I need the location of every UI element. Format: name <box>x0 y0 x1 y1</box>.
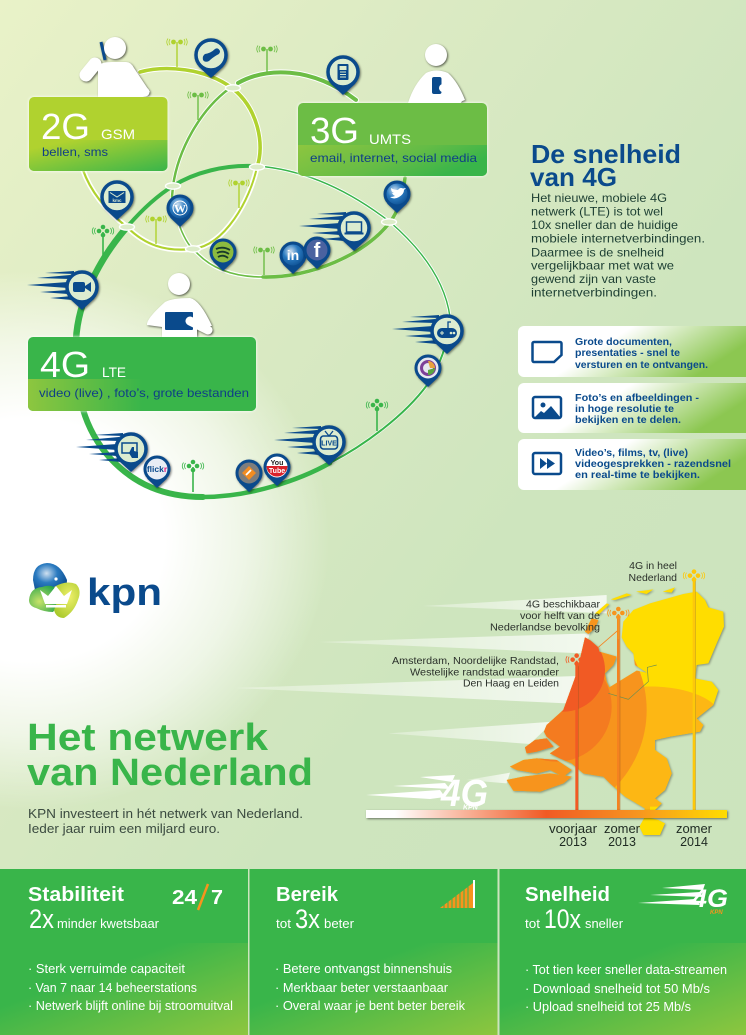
panel: documenten <box>518 326 746 377</box>
icon: mail pin <box>102 182 132 220</box>
metric: 3x <box>276 904 355 934</box>
icon: youtube pin <box>265 455 289 486</box>
timeline labels: 2013 <box>608 835 636 849</box>
mast: zomer 2013 <box>608 607 629 810</box>
text: foto's <box>575 392 700 426</box>
heading: De snelheid van 4G: De snelheid <box>531 139 681 169</box>
timeline labels: zomer <box>676 822 712 836</box>
bullets: · Netwerk blijft online bij stroomuitval <box>28 999 233 1013</box>
text: documenten <box>575 336 708 371</box>
icon: 24/7: 24 <box>172 887 198 909</box>
icon: twitter pin <box>385 182 409 213</box>
text: subtitle <box>28 806 303 836</box>
map labels: 4G beschikbaar <box>526 598 601 610</box>
bullets <box>28 962 233 1013</box>
bullets: · Download snelheid tot 50 Mb/s <box>525 982 710 996</box>
icon: fast forward <box>533 453 561 474</box>
map labels: Westelijke randstad waaronder <box>410 666 560 678</box>
timeline labels: voorjaar <box>549 822 597 836</box>
text: documenten: Grote documenten, <box>575 336 672 348</box>
metric: 2x: 2x <box>29 904 54 934</box>
metric: 10x: 10x <box>544 904 581 934</box>
2G loop <box>83 69 260 250</box>
icon: mail pin: kmc <box>112 198 122 203</box>
icon: 4G KPN: 4G <box>691 885 728 913</box>
icon: live tv pin with speed lines: LIVE <box>321 440 337 448</box>
panel: bereik <box>250 869 498 1035</box>
bullets: · Betere ontvangst binnenshuis <box>275 962 452 976</box>
title: van Nederland <box>27 752 313 794</box>
text: subtitle: KPN investeert in hét netwerk van Nederland. <box>28 806 303 821</box>
icon: touch screen pin with speed lines <box>76 433 146 472</box>
logo: 4G speed: 4G <box>440 773 488 815</box>
panel: 3G UMTS <box>298 103 487 176</box>
text: kpn wordmark: kpn <box>87 572 162 614</box>
text: 4G intro: internetverbindingen. <box>531 286 657 300</box>
text: foto's: Foto’s en afbeeldingen - <box>575 392 700 404</box>
text: 4G intro: 10x sneller dan de huidige <box>531 218 678 232</box>
title <box>27 717 313 794</box>
text: 4G intro: mobiele internetverbindingen. <box>531 232 705 246</box>
metric: 10x: sneller <box>585 916 624 931</box>
map: Nederland coverage <box>506 588 726 838</box>
icon: share pin <box>237 461 261 492</box>
panel: 2G GSM <box>29 97 168 171</box>
bullets: · Van 7 naar 14 beheerstations <box>28 981 197 995</box>
icon: flickr pin: flickr <box>147 464 168 474</box>
icon: 4G KPN: KPN <box>710 910 723 916</box>
icon: image <box>533 397 561 418</box>
timeline labels: 2013 <box>559 835 587 849</box>
icon: youtube pin: You <box>271 460 283 467</box>
heading: stabiliteit: Stabiliteit <box>28 884 124 906</box>
panel: snelheid <box>500 869 746 1035</box>
text: 4G intro <box>531 191 705 300</box>
text: email, internet, social media: email, internet, social media <box>310 151 477 165</box>
network nodes <box>120 85 396 252</box>
heading: 3G: 3G <box>310 110 359 151</box>
label: GSM: GSM <box>101 126 135 142</box>
bullets <box>525 963 727 1014</box>
bullets: · Merkbaar beter verstaanbaar <box>275 981 448 995</box>
panel: foto's <box>518 383 746 433</box>
icon: game controller pin with speed lines <box>392 315 462 354</box>
bullets: · Sterk verruimde capaciteit <box>28 962 186 976</box>
icon: wordpress pin: W <box>174 202 186 216</box>
icon: 24/7 <box>172 884 223 910</box>
person: 4G <box>147 273 212 338</box>
person: 3G <box>408 44 465 104</box>
icon: youtube pin: Tube <box>269 468 285 475</box>
map labels <box>392 560 677 690</box>
map labels: Den Haag en Leiden <box>463 678 559 690</box>
heading: bereik: Bereik <box>276 884 339 906</box>
icon: laptop pin with speed lines <box>299 212 369 251</box>
icon: signal bars <box>440 880 475 908</box>
text: 4G intro: Daarmee is de snelheid <box>531 246 664 260</box>
text: 4G intro: Het nieuwe, mobiele 4G <box>531 191 667 205</box>
heading: snelheid: Snelheid <box>525 884 610 906</box>
text: video's <box>575 447 731 481</box>
icon: facebook pin <box>305 238 329 269</box>
text: documenten: versturen en te ontvangen. <box>575 359 708 371</box>
label: UMTS: UMTS <box>369 131 411 147</box>
title: Het netwerk <box>27 717 269 759</box>
network diagram lines <box>76 69 450 497</box>
bullets: · Tot tien keer sneller data-streamen <box>525 963 727 977</box>
label: LTE: LTE <box>102 364 126 380</box>
metric label: minder kwetsbaar <box>57 916 160 931</box>
person: 2G <box>86 37 150 97</box>
logo: KPN <box>29 563 162 618</box>
text: video, foto's: video (live) , foto’s, grote bestanden <box>39 386 249 400</box>
text: documenten: presentaties - snel te <box>575 347 680 359</box>
antennas <box>92 38 388 492</box>
map labels: voor helft van de <box>520 610 600 622</box>
text: video's: videogesprekken - razendsnel <box>575 458 731 470</box>
icon: 4G KPN <box>638 884 728 916</box>
timeline labels <box>549 822 712 849</box>
logo: 4G speed: KPN <box>463 804 479 812</box>
text: video's: Video’s, films, tv, (live) <box>575 447 688 459</box>
text: 4G intro: vergelijkbaar met wat we <box>531 258 674 272</box>
heading: De snelheid van 4G: van 4G <box>530 162 617 192</box>
text: 4G intro: netwerk (LTE) is tot wel <box>531 204 663 218</box>
text: video's: en real-time te bekijken. <box>575 469 700 481</box>
icon: 24/7: 7 <box>211 887 223 909</box>
icon: live tv pin with speed lines <box>274 426 344 465</box>
text: 4G intro: gewend zijn van vaste <box>531 272 656 286</box>
timeline labels: 2014 <box>680 835 708 849</box>
icon: linkedin pin <box>281 243 305 274</box>
metric: 3x: 3x <box>295 904 320 934</box>
metric: 3x: tot <box>276 916 291 931</box>
map labels: Amsterdam, Noordelijke Randstad, <box>392 655 559 667</box>
icon: facebook pin: f <box>314 240 321 262</box>
bullets: · Overal waar je bent beter bereik <box>275 999 466 1013</box>
map labels: Nederlandse bevolking <box>490 622 600 634</box>
panel: video's <box>518 439 746 490</box>
timeline labels: zomer <box>604 822 640 836</box>
timeline bar <box>366 810 727 818</box>
heading: De snelheid van 4G <box>530 139 681 192</box>
map labels: Nederland <box>629 572 677 584</box>
text: bellen, sms: bellen, sms <box>42 145 108 159</box>
text: foto's: in hoge resolutie te <box>575 403 674 415</box>
3G loop <box>172 72 405 277</box>
logo: 4G speed <box>366 773 488 815</box>
icon: spotify pin <box>211 240 235 271</box>
icon: picasa pin <box>416 356 440 387</box>
icon: phone pin <box>196 40 226 78</box>
panel: stabiliteit <box>0 869 248 1035</box>
text: foto's: bekijken en te delen. <box>575 414 681 426</box>
metric: 10x <box>525 904 624 934</box>
bullets <box>275 962 466 1013</box>
bullets: · Upload snelheid tot 25 Mb/s <box>525 1000 691 1014</box>
icon: video camera pin with speed lines <box>27 271 97 310</box>
text: subtitle: Ieder jaar ruim een miljard euro. <box>28 821 220 836</box>
icon: mobile pin <box>328 57 358 95</box>
heading: 2G: 2G <box>41 106 90 147</box>
map labels: 4G in heel <box>629 560 677 572</box>
mast: voorjaar 2013 <box>566 653 587 810</box>
icon: document <box>532 342 562 362</box>
metric: 10x: tot <box>525 916 540 931</box>
light beams <box>235 595 607 783</box>
icon: linkedin pin: in <box>287 247 299 263</box>
icon: flickr pin <box>145 457 169 488</box>
metric: 3x: beter <box>324 916 355 931</box>
masts <box>566 569 705 810</box>
heading: 4G: 4G <box>40 344 90 385</box>
4G loop <box>76 166 450 497</box>
panel: 4G LTE <box>28 337 256 411</box>
mast: zomer 2014 <box>683 569 705 810</box>
icon: wordpress pin <box>168 196 192 227</box>
